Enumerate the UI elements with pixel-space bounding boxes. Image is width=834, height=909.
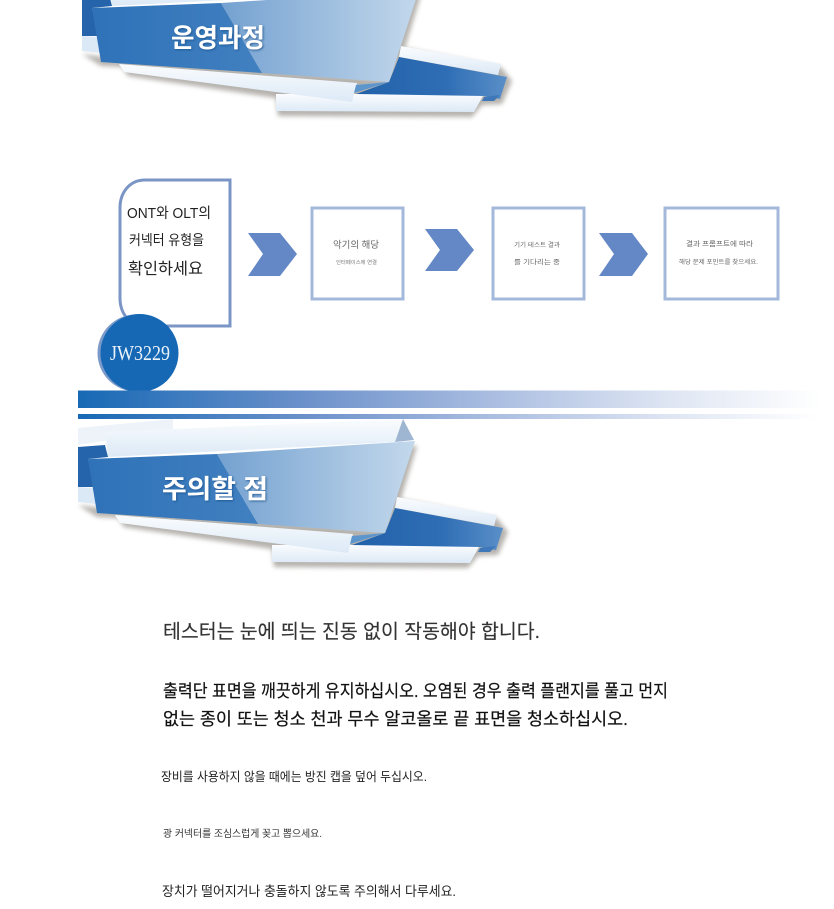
text: keep output end clean: 출력단 표면을 깨끗하게 유지하십시오. 오염된 경우 출력 플랜지를 풀고 먼지 [163,681,668,701]
badge: model JW3229: JW3229 [110,341,170,365]
text: dust cap note: 장비를 사용하지 않을 때에는 방진 캡을 덮어 두십시오. [161,770,427,784]
arrow: step 1 to 2 [248,233,297,276]
panel: step 2 connect interface [312,208,403,299]
panel: step 3 wait for test result: 를 기다리는 중 [514,257,560,266]
arrow: step 2 to 3 [425,229,474,271]
gradient divider band [78,390,820,419]
title: precautions: 주의할 점 [162,474,268,504]
ribbon banner: operation process [82,0,512,117]
panel: step 1 check connector type [120,180,230,326]
text: keep output end clean: 없는 종이 또는 청소 천과 무수 알코올로 끝 표면을 청소하십시오. [163,709,628,729]
title: operation process: 운영과정 [171,23,265,53]
panel: step 3 wait for test result: 기기 테스트 결과 [514,241,561,249]
panel: step 3 wait for test result [493,208,584,299]
panel: step 1 check connector type: 커넥터 유형을 [129,232,204,248]
badge: model JW3229 [98,314,178,392]
text: vibration note: 테스터는 눈에 띄는 진동 없이 작동해야 합니다. [163,621,540,643]
panel: step 2 connect interface: 악기의 해당 [333,239,379,251]
panel: step 4 find fault point: 해당 문제 포인트를 찾으세요. [679,258,758,266]
panel: step 1 check connector type: ONT와 OLT의 [127,205,211,222]
text: connector handling note: 광 커넥터를 조심스럽게 꽂고 뽑으세요. [163,828,322,840]
panel: step 4 find fault point [665,208,778,299]
arrow: step 3 to 4 [599,233,648,276]
panel: step 2 connect interface: 인터페이스에 연결 [336,259,377,266]
text: keep output end clean [163,681,668,729]
panel: step 4 find fault point: 결과 프롬프트에 따라 [686,239,754,248]
ribbon banner: precautions [78,419,508,568]
panel: step 1 check connector type: 확인하세요 [128,260,203,278]
text: drop handling note: 장치가 떨어지거나 충돌하지 않도록 주의해서 다루세요. [162,884,456,899]
